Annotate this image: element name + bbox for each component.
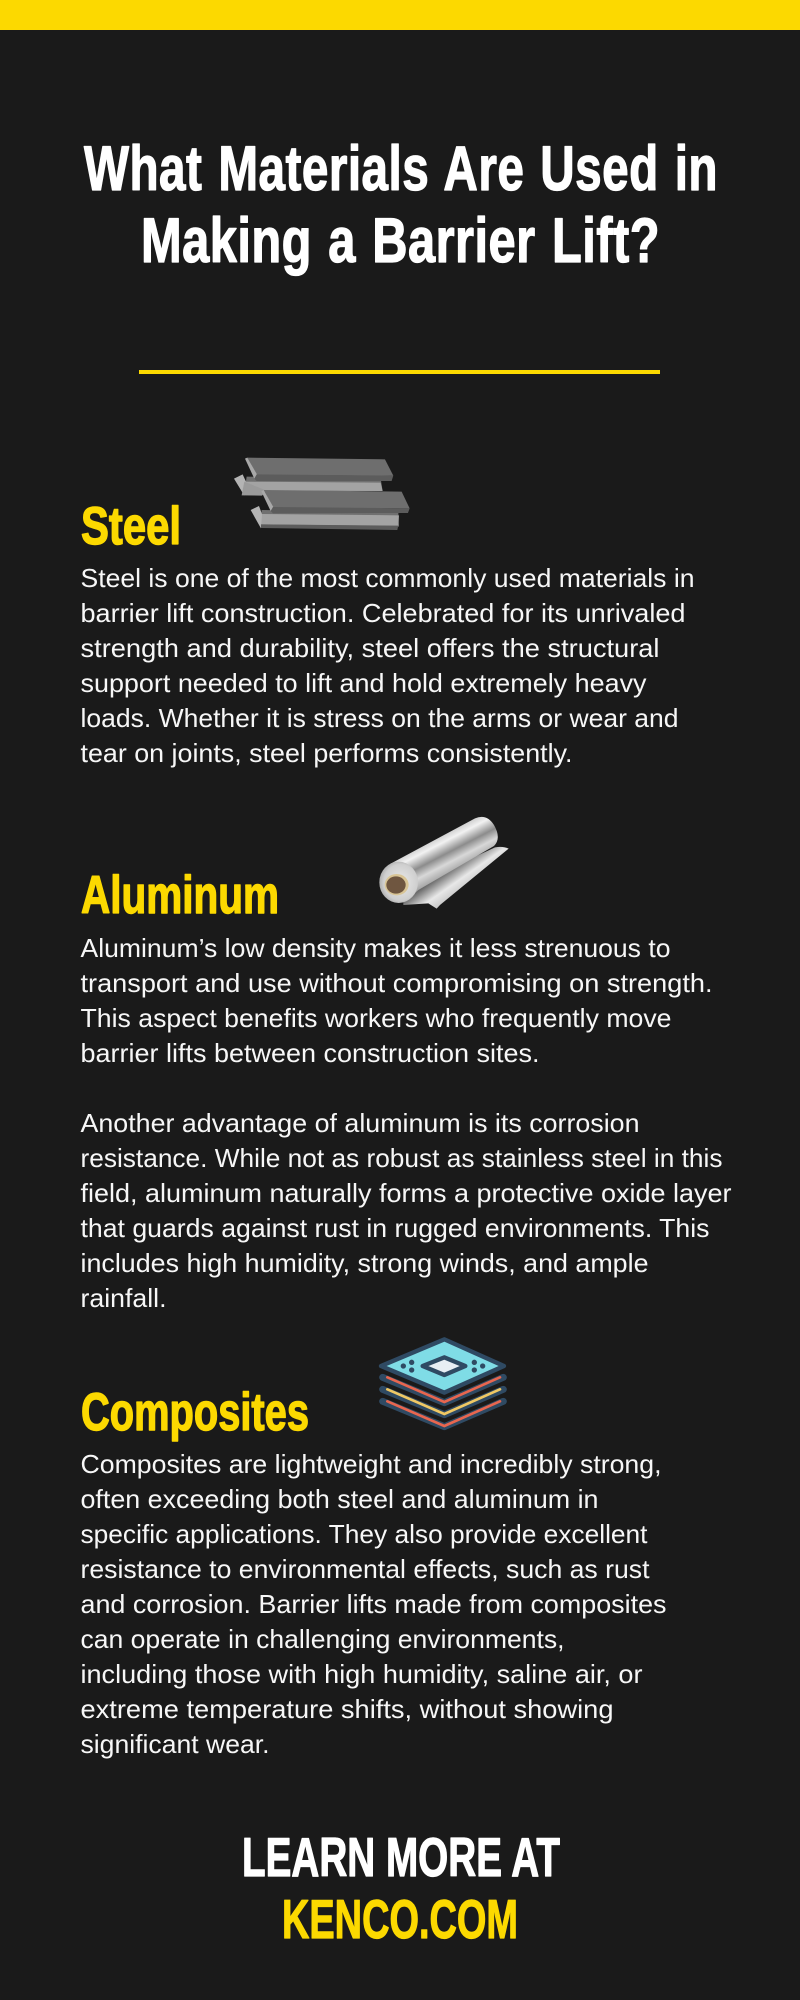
body text: aluminum paragraph 1: Aluminum’s low density makes it less strenuous to [80, 933, 670, 963]
body text: aluminum paragraph 2: field, aluminum naturally forms a protective oxide layer [80, 1178, 732, 1208]
body text: aluminum paragraph 2: that guards against rust in rugged environments. This [80, 1213, 710, 1243]
icon: composite layers [381, 1339, 504, 1427]
divider rule [139, 370, 660, 374]
body text: aluminum paragraph 2: Another advantage of aluminum is its corrosion [80, 1108, 640, 1138]
heading: composites: Composites [81, 1383, 309, 1442]
panel: steel [80, 458, 694, 768]
body text: aluminum paragraph 2: rainfall. [80, 1283, 166, 1313]
title [84, 134, 718, 276]
body text: composites: and corrosion. Barrier lifts made from composites [80, 1589, 666, 1619]
body text: composites: significant wear. [80, 1729, 270, 1759]
body text: composites: including those with high humidity, saline air, or [80, 1659, 643, 1689]
body text: aluminum paragraph 1: transport and use without compromising on strength. [80, 968, 712, 998]
body text: steel: Steel is one of the most commonly used materials in [80, 563, 694, 593]
footer call to action: KENCO.COM [282, 1888, 518, 1950]
heading: steel: Steel [81, 497, 181, 556]
icon: steel beams [234, 458, 410, 530]
body text: aluminum paragraph 2: includes high humidity, strong winds, and ample [80, 1248, 648, 1278]
body text: aluminum paragraph 1: barrier lifts between construction sites. [80, 1038, 540, 1068]
body text: steel [80, 563, 694, 768]
body text: composites: specific applications. They also provide excellent [80, 1519, 648, 1549]
body text: composites: Composites are lightweight and incredibly strong, [80, 1449, 662, 1479]
body text: composites: resistance to environmental effects, such as rust [80, 1554, 650, 1584]
body text: steel: support needed to lift and hold extremely heavy [80, 668, 646, 698]
body text: aluminum paragraph 2 [80, 1108, 732, 1313]
footer call to action: LEARN MORE AT [242, 1826, 560, 1888]
body text: composites: extreme temperature shifts, without showing [80, 1694, 614, 1724]
panel: composites [80, 1339, 666, 1759]
body text: steel: loads. Whether it is stress on the arms or wear and [80, 703, 678, 733]
body text: steel: tear on joints, steel performs consistently. [80, 738, 572, 768]
heading: aluminum: Aluminum [81, 866, 279, 925]
body text: aluminum paragraph 1: This aspect benefits workers who frequently move [80, 1003, 672, 1033]
icon: aluminum foil roll [379, 817, 509, 909]
body text: composites: often exceeding both steel and aluminum in [80, 1484, 598, 1514]
body text: aluminum paragraph 1 [80, 933, 712, 1068]
body text: steel: strength and durability, steel offers the structural [80, 633, 660, 663]
top yellow band [0, 0, 800, 30]
title: Making a Barrier Lift? [141, 206, 660, 276]
body text: composites: can operate in challenging environments, [80, 1624, 564, 1654]
body text: composites [80, 1449, 666, 1759]
panel: aluminum [80, 817, 732, 1313]
body text: steel: barrier lift construction. Celebrated for its unrivaled [80, 598, 686, 628]
body text: aluminum paragraph 2: resistance. While not as robust as stainless steel in this [80, 1143, 723, 1173]
footer call to action [242, 1826, 560, 1950]
